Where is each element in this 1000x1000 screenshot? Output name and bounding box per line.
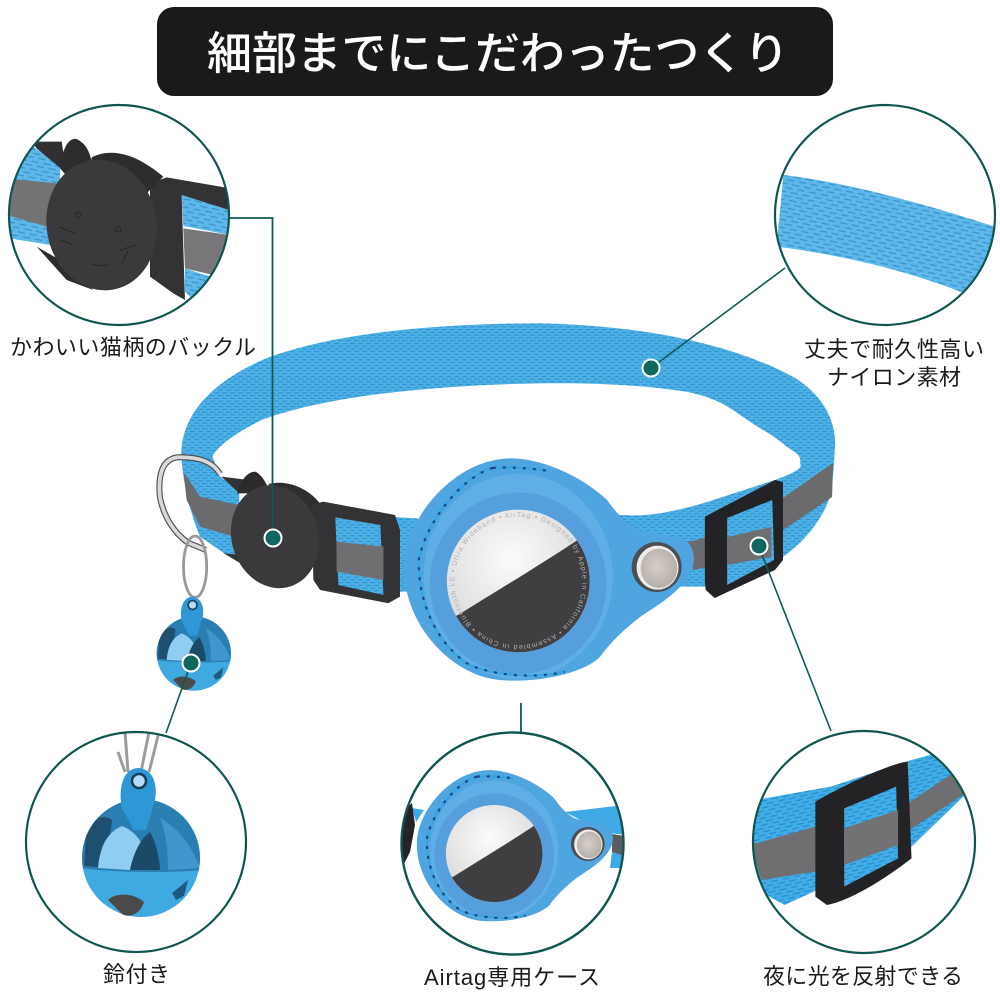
label: nylon <box>804 337 984 390</box>
nylon collar band <box>181 323 835 587</box>
dot: bell <box>182 654 200 672</box>
cat ear left <box>237 472 270 493</box>
label: nylon: 丈夫で耐久性高い <box>804 337 984 362</box>
panel: nylon close-up <box>775 105 1000 325</box>
label: cat buckle: かわいい猫柄のバックル <box>10 335 256 360</box>
cat disc <box>224 482 326 591</box>
collar product photo <box>156 323 836 691</box>
label: bell: 鈴付き <box>103 962 170 987</box>
dot: nylon <box>642 360 660 376</box>
cat buckle bottom shadow <box>224 553 257 573</box>
panel: cat buckle close-up <box>5 105 233 325</box>
front strap <box>387 517 418 592</box>
airtag holder <box>404 458 694 681</box>
panel: airtag case close-up <box>400 732 625 954</box>
connector line: bell <box>166 663 191 733</box>
cat ear right <box>268 483 321 523</box>
reflective stripe front right <box>688 537 708 570</box>
bell split ring <box>183 536 207 597</box>
connector line: nylon <box>651 268 785 368</box>
airtag engraved text: AirTag • Designed by Apple in California • Assembled in China • Bluetooth LE • Ultra Wideband • <box>450 512 588 650</box>
D ring <box>159 457 220 550</box>
dot: buckle <box>264 530 282 546</box>
panel: reflective adjuster close-up <box>746 731 985 953</box>
label: reflective: 夜に光を反射できる <box>763 964 963 989</box>
connector line: airtag case <box>520 703 522 732</box>
slide buckle right <box>705 480 783 598</box>
label: airtag case: Airtag専用ケース <box>424 965 600 990</box>
label: nylon: ナイロン素材 <box>827 365 961 390</box>
slide buckle left <box>312 502 400 603</box>
cat buckle top shadow <box>221 477 248 493</box>
title banner <box>157 7 833 96</box>
reflective stripe left <box>183 472 239 538</box>
connector line: buckle <box>230 218 272 538</box>
small bell <box>155 597 234 691</box>
title banner: 細部までにこだわったつくり <box>207 28 789 79</box>
reflective stripe right <box>783 463 833 530</box>
panel: bell close-up <box>26 732 246 952</box>
connector line: adjuster <box>759 547 831 731</box>
dot: adjuster <box>750 538 768 554</box>
